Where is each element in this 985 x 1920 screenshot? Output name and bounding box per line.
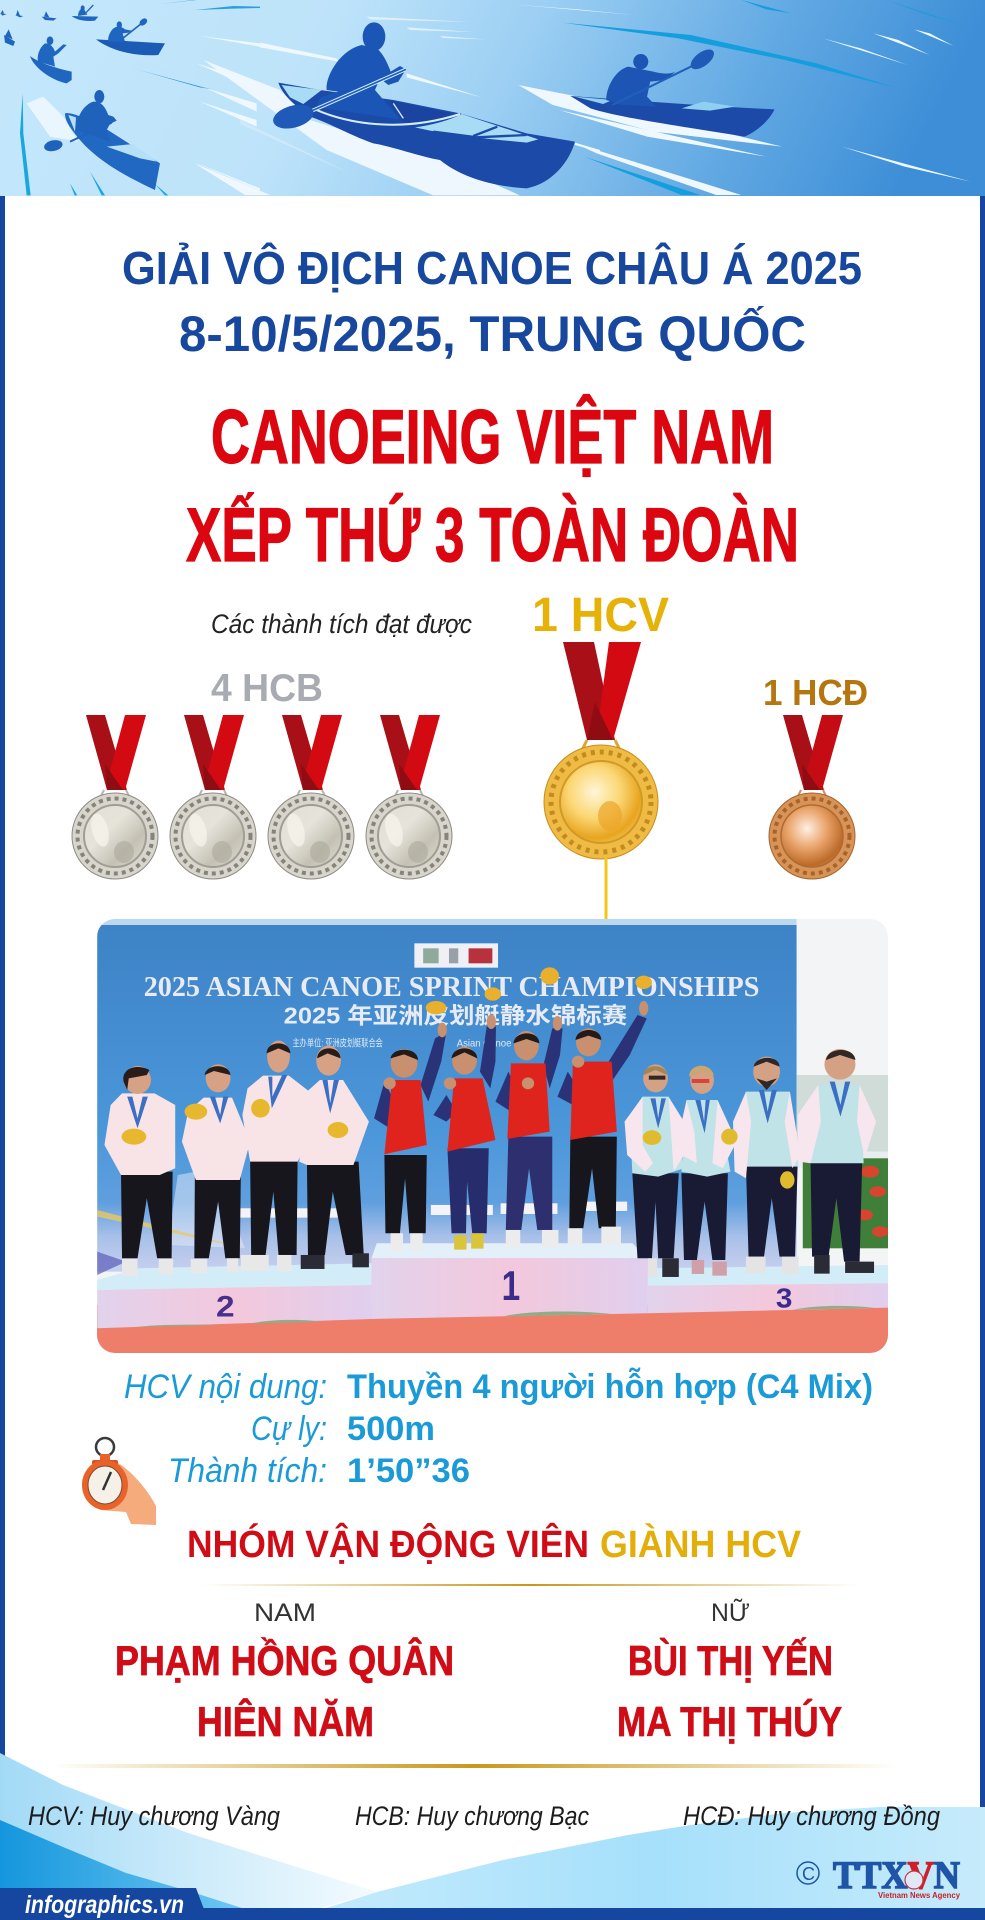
column: female athletes: BÙI THỊ YẾN	[628, 1636, 833, 1684]
title: championship name and date	[122, 242, 862, 362]
cyan streaks	[562, 0, 967, 195]
event details: values: Thuyền 4 người hỗn hợp (C4 Mix)	[347, 1368, 873, 1406]
title: championship name and date: 8-10/5/2025, TRUNG QUỐC	[179, 305, 806, 362]
backdrop organiser text: Asian Canoe Conf	[457, 1037, 534, 1049]
logo: TTXVN: Vietnam News Agency	[878, 1890, 960, 1900]
headline: Vietnam ranking	[186, 394, 799, 578]
heading: gold medal athletes	[187, 1521, 802, 1566]
website tab: infographics.vn: infographics.vn	[25, 1891, 184, 1919]
column: female athletes: NỮ	[711, 1598, 750, 1627]
label: 1 bronze medal: 1 HCĐ	[763, 672, 868, 713]
divider	[50, 1764, 898, 1768]
icon: stopwatch in hand	[82, 1438, 156, 1525]
right canoe	[570, 48, 775, 137]
podium 3: 3	[776, 1282, 792, 1314]
label: 4 silver medals: 4 HCB	[211, 667, 323, 710]
event details: labels: Thành tích:	[168, 1452, 327, 1490]
event details: labels	[124, 1368, 327, 1490]
footer waves	[0, 1753, 985, 1920]
podium 3	[648, 1265, 888, 1314]
banner: canoe racers illustration	[0, 0, 985, 196]
title: championship name and date: GIẢI VÔ ĐỊCH CANOE CHÂU Á 2025	[122, 242, 862, 294]
podium 2: 2	[216, 1291, 235, 1324]
legend: abbreviations: HCĐ: Huy chương Đồng	[683, 1801, 940, 1831]
column: male athletes: PHẠM HỒNG QUÂN	[115, 1636, 454, 1684]
column: female athletes: MA THỊ THÚY	[617, 1697, 842, 1745]
backdrop headline text: 2025 年亚洲皮划艇静水锦标赛	[284, 1004, 627, 1029]
medals section label: Các thành tích đạt được	[211, 609, 472, 639]
event details: values: 500m	[347, 1410, 435, 1448]
headline: Vietnam ranking: CANOEING VIỆT NAM	[211, 394, 774, 480]
ground	[97, 1305, 888, 1353]
sponsor logos	[414, 943, 498, 968]
heading: gold medal athletes: GIÀNH HCV	[600, 1522, 802, 1566]
logo: TTXVN: TTXVN	[833, 1854, 960, 1897]
event details: labels: Cự ly:	[251, 1410, 327, 1448]
logo: TTXVN: C	[802, 1864, 815, 1884]
China team (silver)	[104, 1041, 369, 1276]
backdrop lower decoration	[97, 1168, 627, 1275]
event details: values: 1’50”36	[347, 1452, 470, 1490]
left fleet of small canoes	[0, 0, 260, 195]
backdrop organiser text: 主办单位: 亚洲皮划艇联合会	[292, 1037, 383, 1049]
event details: values	[347, 1368, 873, 1490]
column: male athletes: NAM	[254, 1599, 316, 1627]
bronze medal	[769, 715, 855, 879]
white water streaks	[195, 5, 971, 195]
footer band	[0, 1908, 985, 1920]
heading: gold medal athletes: NHÓM VẬN ĐỘNG VIÊN	[187, 1521, 589, 1566]
big center canoe	[203, 17, 600, 195]
event details: labels: HCV nội dung:	[124, 1368, 327, 1406]
distant trees and bushes	[797, 1075, 890, 1248]
gold connector line	[604, 858, 608, 920]
backdrop headline text	[144, 977, 758, 1026]
backdrop banner	[97, 925, 797, 1272]
Vietnam team (gold) raising flowers	[374, 967, 652, 1251]
divider	[200, 1584, 860, 1586]
podium 2	[97, 1263, 371, 1328]
photo: medal podium at the championships	[90, 919, 900, 1365]
silver medals row	[72, 715, 452, 879]
column: male athletes: HIÊN NĂM	[197, 1697, 374, 1745]
podium 1	[371, 1243, 648, 1319]
gold medal	[544, 642, 658, 859]
column: male athletes	[115, 1599, 454, 1745]
legend: abbreviations	[28, 1801, 940, 1831]
column: female athletes	[617, 1598, 842, 1745]
podium 1: 1	[502, 1262, 520, 1309]
legend: abbreviations: HCV: Huy chương Vàng	[28, 1801, 280, 1831]
label: 1 gold medal: 1 HCV	[532, 589, 669, 642]
Kazakhstan team (bronze)	[625, 1049, 876, 1277]
legend: abbreviations: HCB: Huy chương Bạc	[355, 1801, 589, 1831]
